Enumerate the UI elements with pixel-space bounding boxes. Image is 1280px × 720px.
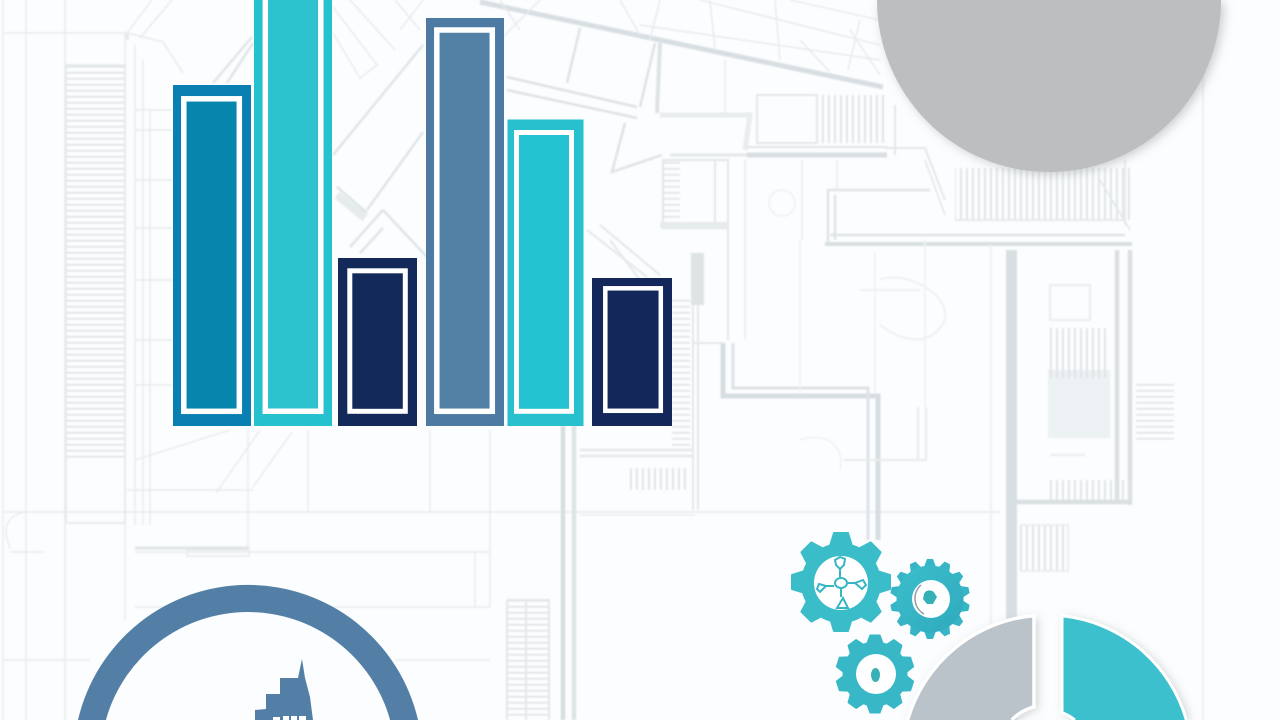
donut segment: teal: [1062, 616, 1186, 720]
bar 5: [508, 120, 584, 426]
bar 6: [592, 278, 672, 426]
ring with city icon: [78, 585, 418, 720]
icon: large gear: [792, 533, 890, 631]
bar 2: [254, 0, 332, 426]
bar chart: [173, 0, 672, 426]
icon: small gear: [835, 635, 915, 713]
donut segment: grey: [908, 616, 1034, 720]
diagonal roof members: [135, 37, 427, 548]
icon: medium gear: [890, 559, 970, 639]
grey circle: [877, 0, 1221, 172]
ring: [78, 585, 418, 720]
bar 4: [426, 18, 504, 426]
icon: skyscraper: [255, 659, 313, 720]
donut chart: [908, 616, 1186, 720]
bar 1: [173, 85, 251, 426]
bar 3: [338, 258, 417, 426]
